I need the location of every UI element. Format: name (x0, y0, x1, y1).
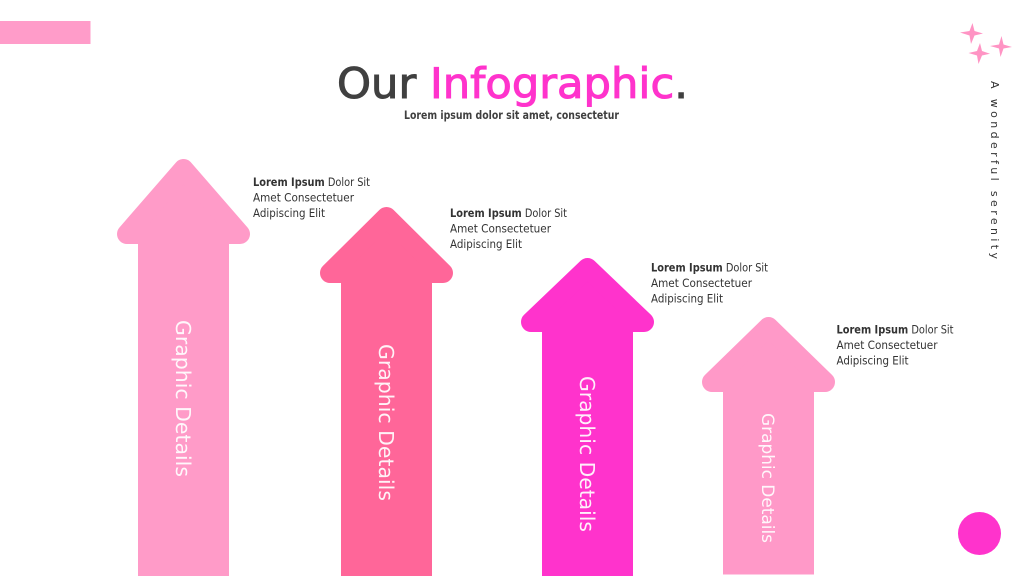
text block 1: Amet Consectetuer (253, 190, 354, 204)
decorative circle (958, 512, 1001, 555)
text block 4: Amet Consectetuer (836, 338, 938, 352)
text block 3 (651, 260, 768, 306)
arrow 2 label: Graphic Details (374, 344, 398, 501)
subtitle: Lorem ipsum dolor sit amet, consectetur (404, 108, 619, 122)
arrow 4 (712, 327, 825, 574)
text block 4: Adipiscing Elit (836, 354, 909, 368)
text block 4: Lorem Ipsum Dolor Sit (836, 322, 954, 336)
text block 4 (836, 322, 954, 368)
text block 3: Amet Consectetuer (651, 276, 752, 290)
text block 3: Adipiscing Elit (651, 292, 723, 306)
side caption: A wonderful serenity (988, 81, 1001, 259)
decorative top-left bar (0, 21, 90, 44)
text block 2 (450, 206, 567, 251)
arrow 3 label: Graphic Details (575, 376, 599, 532)
title: Our Infographic. (337, 59, 688, 108)
text block 2: Lorem Ipsum Dolor Sit (450, 206, 567, 220)
icon: sparkles (960, 23, 1012, 64)
arrow 1 label: Graphic Details (171, 320, 195, 477)
text block 1: Adipiscing Elit (253, 206, 325, 220)
text block 2: Adipiscing Elit (450, 237, 522, 251)
text block 2: Amet Consectetuer (450, 222, 551, 236)
text block 1 (253, 175, 370, 220)
arrow 3 (531, 268, 644, 576)
text block 3: Lorem Ipsum Dolor Sit (651, 260, 768, 274)
arrow 2 (330, 217, 443, 576)
arrow 1 (127, 169, 240, 576)
text block 1: Lorem Ipsum Dolor Sit (253, 175, 370, 189)
arrow 4 label: Graphic Details (757, 413, 777, 543)
